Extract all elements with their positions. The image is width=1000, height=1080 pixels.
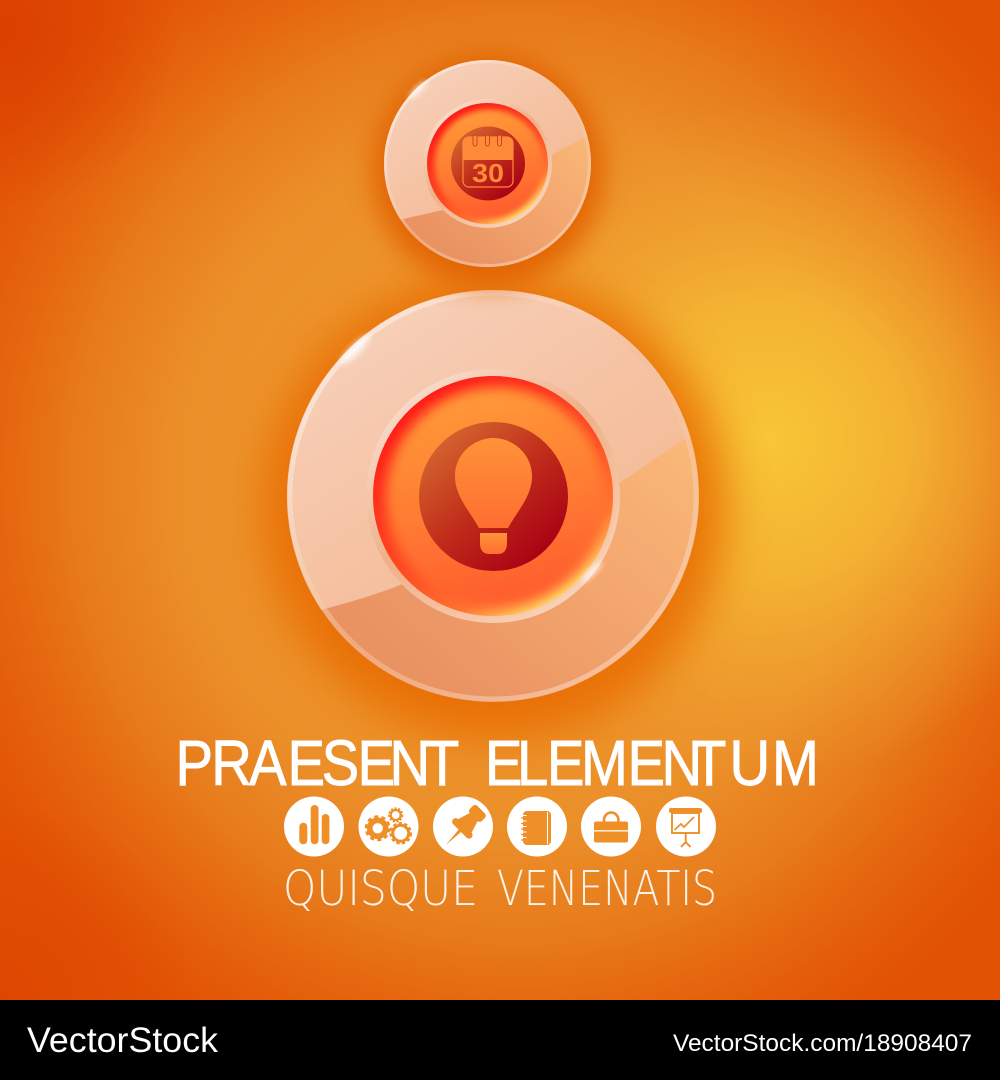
footer bar (0, 1000, 1000, 1080)
small red disc (427, 103, 548, 224)
small ring lower (384, 60, 591, 267)
big ring upper gloss (287, 290, 690, 610)
big red disc (373, 376, 613, 616)
subtitle (283, 861, 717, 917)
footer image id: VectorStock.com/18908407 (673, 1030, 972, 1057)
icon: gears (358, 796, 418, 856)
big circle shadow (262, 276, 726, 740)
icon: notebook (507, 796, 567, 856)
small inner bezel (423, 99, 552, 228)
dark disc small (451, 126, 525, 200)
big disc tint (386, 387, 606, 607)
small glass circle (372, 54, 604, 286)
footer brand: VectorStock (27, 1021, 219, 1060)
big ring lower (287, 290, 699, 702)
subtitle: QUISQUE (283, 861, 478, 917)
calendar date number: 30 (472, 158, 504, 188)
big rim sparkle (337, 332, 373, 368)
icon row (284, 796, 716, 856)
small disc tint (434, 110, 544, 218)
subtitle: VENENATIS (497, 861, 717, 917)
icon: calendar (463, 135, 513, 188)
big ring rim (290, 293, 696, 699)
small ring rim (386, 62, 590, 266)
dark disc (419, 422, 568, 571)
icon: presentation board (656, 796, 716, 856)
icon: bar chart (284, 796, 344, 856)
title: PRAESENT ELEMENTUM (176, 727, 819, 799)
icon: briefcase (581, 796, 641, 856)
big glass circle (262, 276, 726, 740)
icon: push pin (433, 796, 493, 856)
small ring upper gloss (384, 60, 588, 220)
small circle shadow (372, 54, 604, 286)
icon: light bulb (455, 438, 532, 554)
small rim sparkle (407, 79, 429, 101)
big bezel sparkle (580, 560, 604, 584)
big inner bezel (366, 369, 620, 623)
